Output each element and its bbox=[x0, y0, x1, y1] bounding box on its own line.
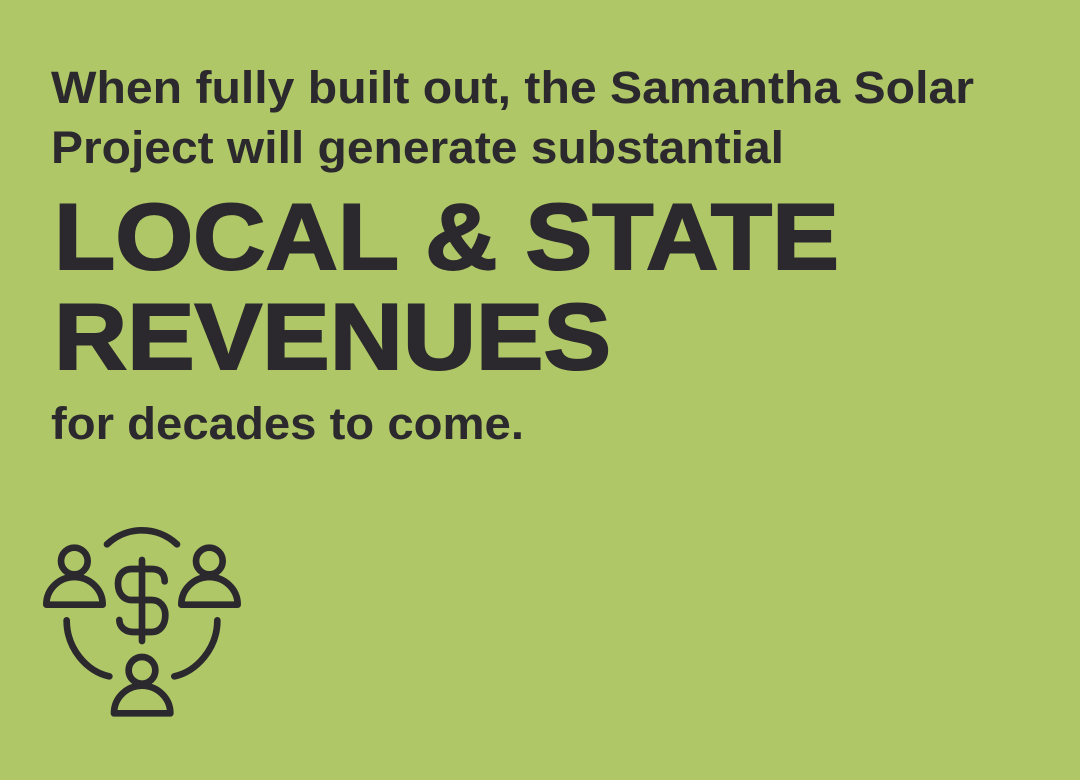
intro text: When fully built out, the Samantha Solar bbox=[51, 62, 974, 113]
heading bbox=[54, 184, 839, 389]
icon: people around dollar sign bbox=[46, 530, 238, 713]
heading: REVENUES bbox=[54, 284, 611, 389]
intro text bbox=[51, 62, 974, 173]
intro text: Project will generate substantial bbox=[51, 122, 784, 173]
closing text: for decades to come. bbox=[51, 398, 524, 449]
heading: LOCAL & STATE bbox=[54, 184, 839, 289]
